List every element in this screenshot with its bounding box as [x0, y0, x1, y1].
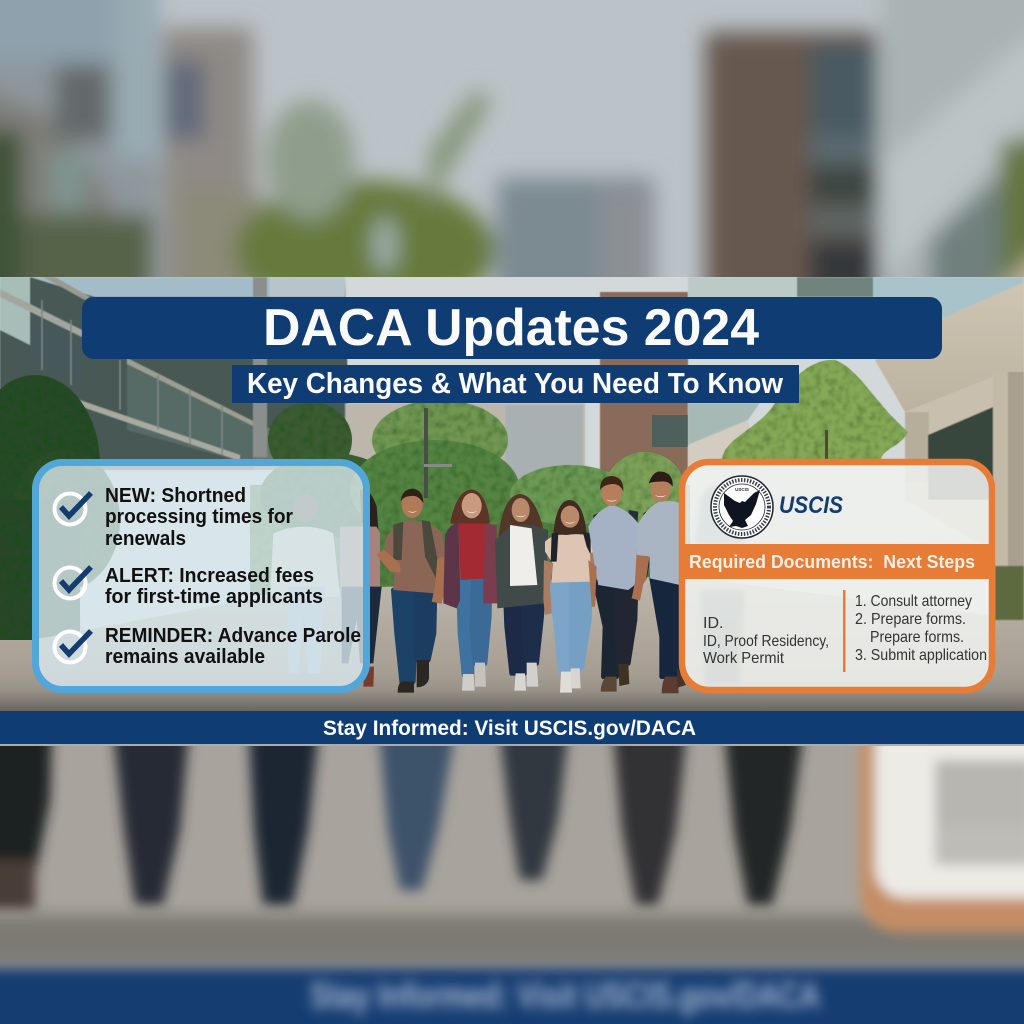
divider [843, 590, 846, 672]
ghost student behind panel [695, 485, 745, 685]
icon: check alert [54, 567, 91, 598]
text: alert: ALERT: Increased fees [105, 565, 314, 587]
left glass building [0, 277, 350, 470]
title banner: DACA Updates 2024 [263, 299, 759, 357]
trees [0, 360, 908, 640]
subtitle banner: Key Changes & What You Need To Know [247, 368, 783, 400]
header band: Required Documents: Next Steps [689, 552, 975, 572]
text: new: renewals [105, 528, 186, 550]
blurred orange panel [854, 746, 1024, 939]
icon: USCIS seal [711, 476, 773, 538]
blurred footer bar [0, 968, 1024, 1024]
text: new: NEW: Shortned [105, 485, 246, 507]
icon: USCIS seal: USCIS [735, 487, 749, 492]
student behind left panel 2 [340, 490, 382, 687]
student: grey shirt [637, 471, 686, 693]
icon: check reminder [54, 631, 91, 662]
student: red top plaid [443, 489, 497, 691]
blurred top background photo [0, 0, 1024, 277]
student: blue shirt [588, 476, 648, 692]
main campus photo scene [0, 277, 1024, 711]
student: brown tee [377, 489, 447, 693]
pavement [0, 576, 1024, 711]
student: white top [495, 494, 548, 691]
footer bar: Stay Informed: Visit USCIS.gov/DACA [323, 717, 696, 740]
blurred bottom background photo [0, 746, 1024, 1024]
next steps list: 1. Consult attorney [855, 593, 972, 610]
icon: check new [54, 493, 91, 524]
tree trunks and lamp post [424, 408, 828, 498]
distant buildings [344, 403, 586, 466]
text: new: processing times for [105, 506, 293, 528]
text: reminder: remains available [105, 646, 265, 668]
header band [679, 544, 995, 579]
next steps list: Prepare forms. [870, 629, 964, 646]
required documents list: ID, Proof Residency, [703, 633, 829, 650]
right building glass [688, 277, 1024, 570]
panel: documents and next steps [679, 462, 995, 690]
next steps list: 3. Submit application [855, 647, 987, 664]
required documents list: Work Permit [703, 650, 785, 667]
text: reminder: REMINDER: Advance Parole [105, 625, 361, 647]
next steps list: 2. Prepare forms. [855, 611, 966, 628]
panel: updates [36, 462, 367, 690]
student behind left panel 1 [270, 494, 340, 673]
blurred footer bar: Stay Informed: Visit USCIS.gov/DACA [310, 975, 820, 1016]
logo wordmark: USCIS [779, 492, 843, 519]
student: cream top [543, 500, 599, 693]
footer bar [0, 711, 1024, 746]
required documents list: ID. [703, 615, 723, 632]
students group [270, 471, 686, 693]
text: alert: for first-time applicants [105, 586, 323, 608]
title banner [82, 297, 942, 359]
